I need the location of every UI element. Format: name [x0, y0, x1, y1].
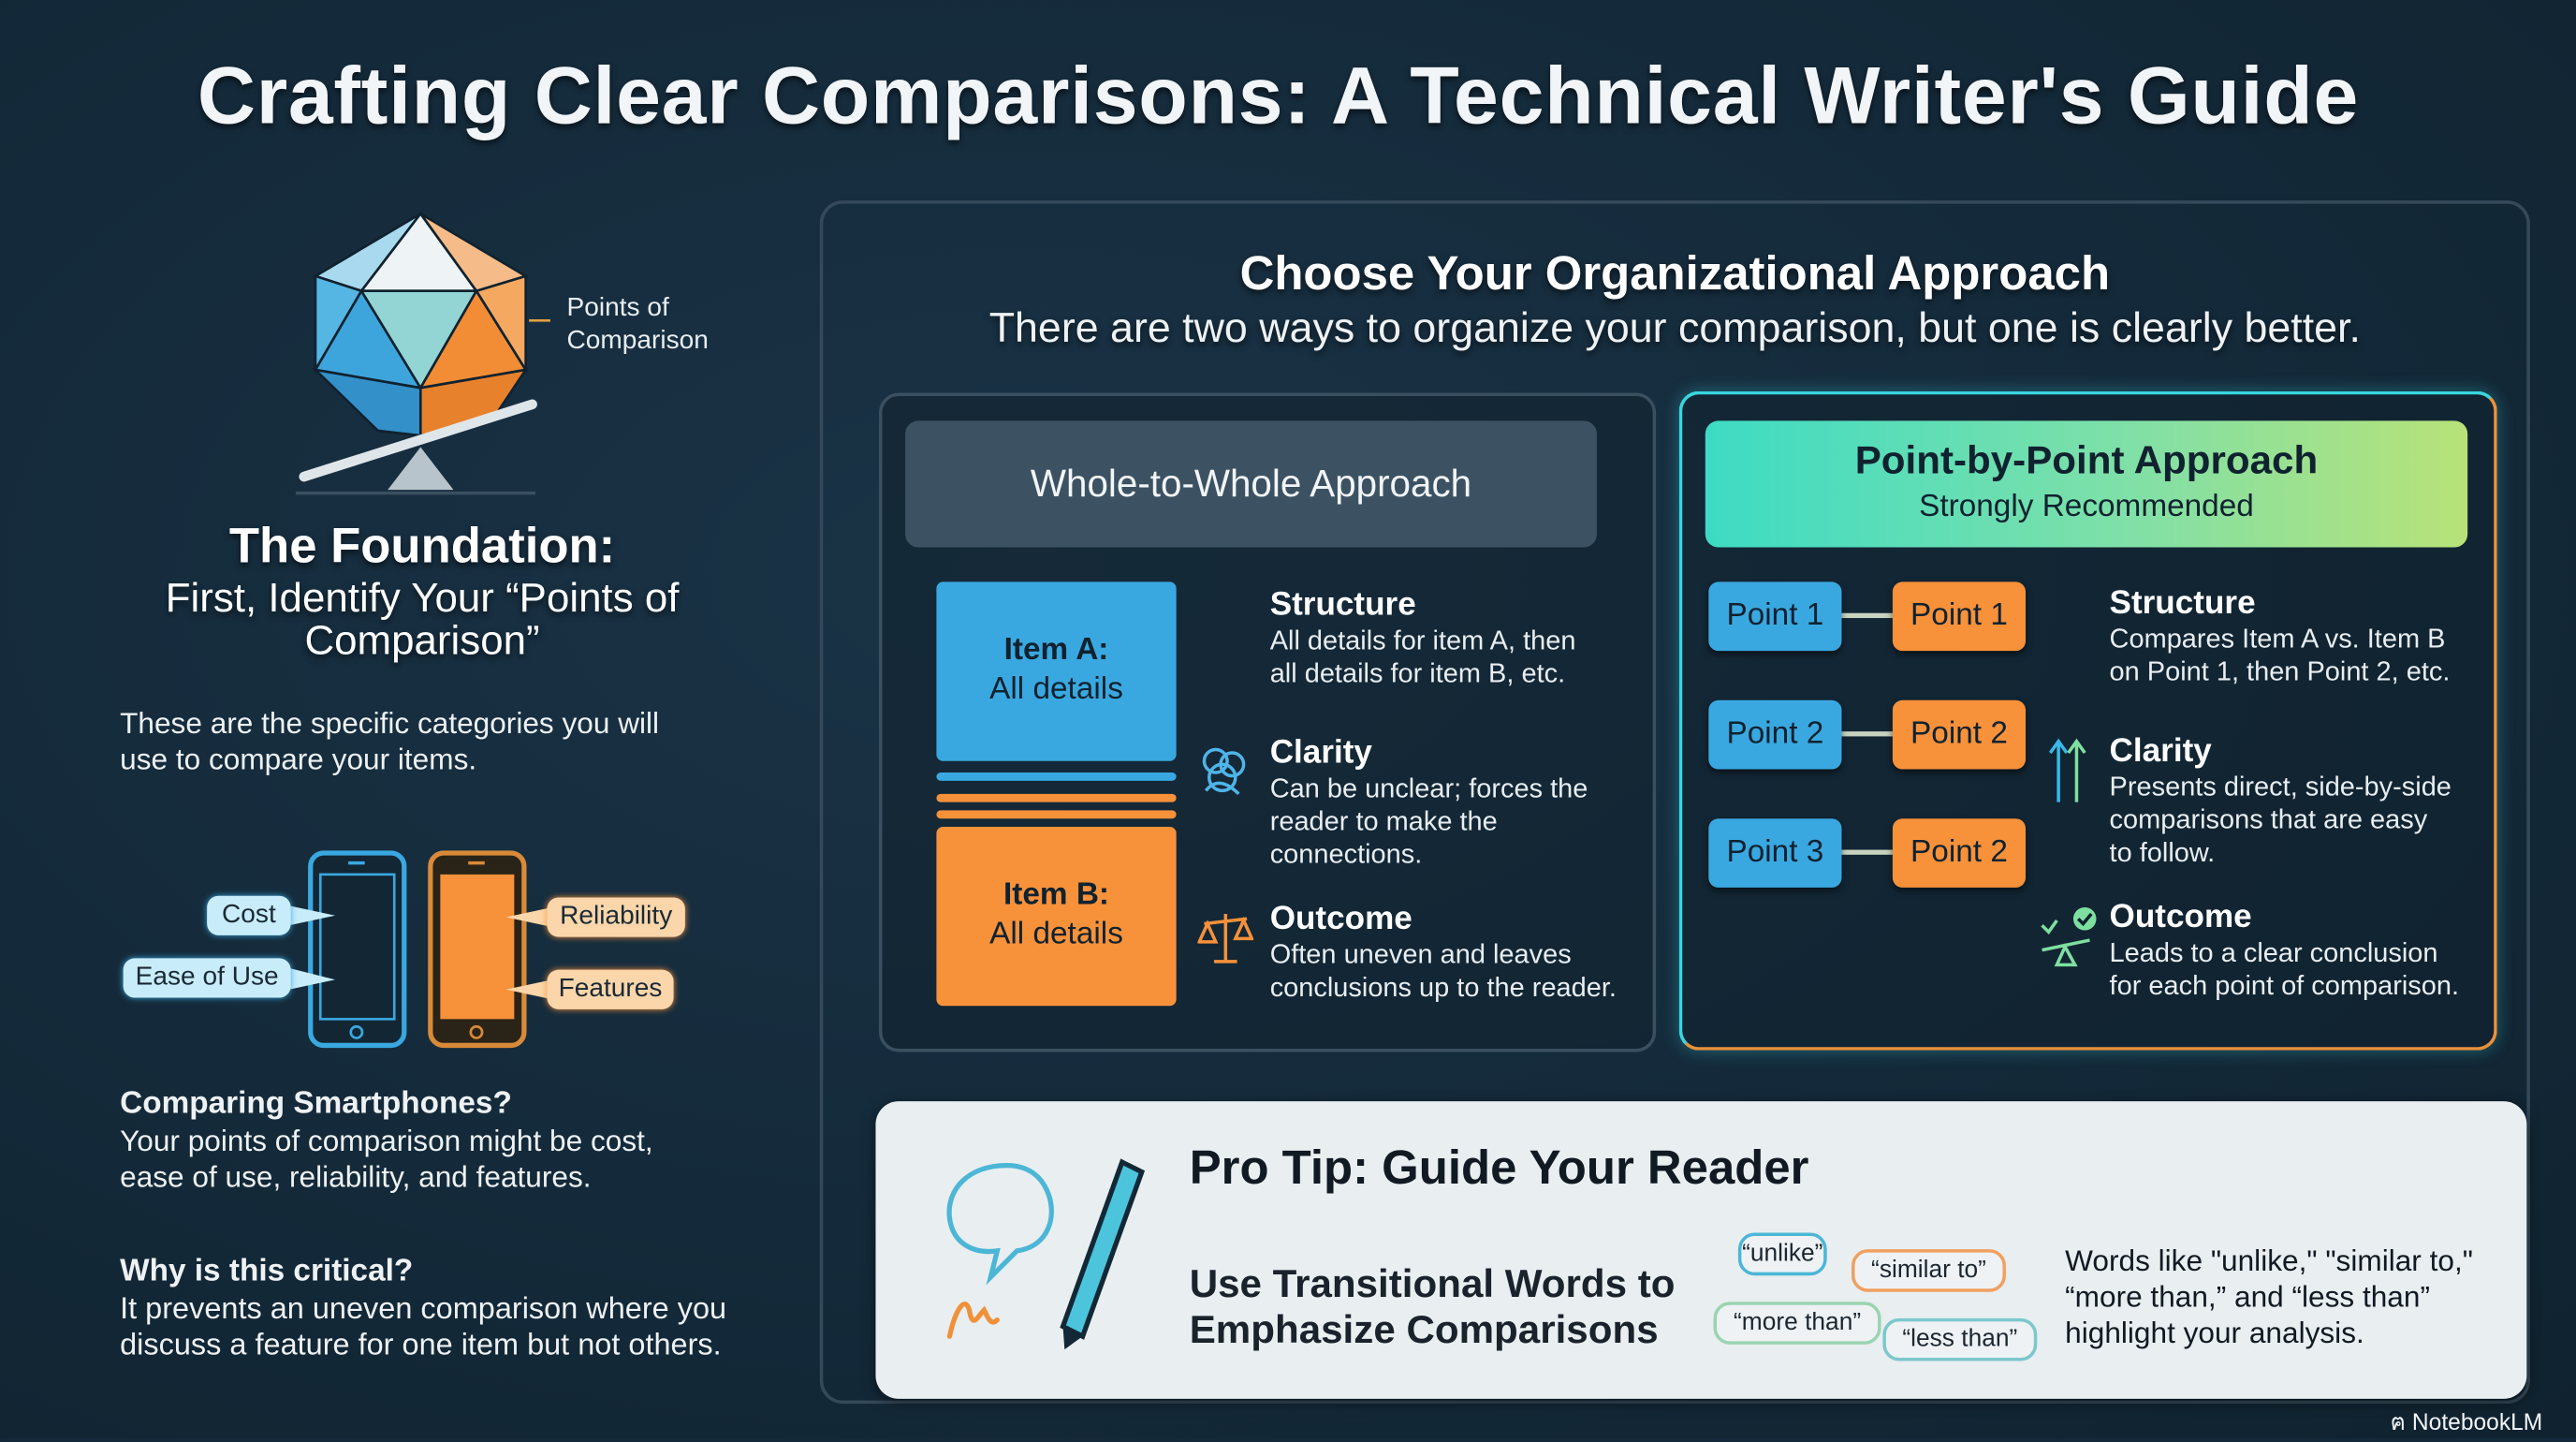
- text: outcome: [1270, 901, 1617, 1003]
- text: clarity: Can be unclear; forces the: [1270, 774, 1588, 803]
- icon: tangled knot: [1202, 747, 1245, 796]
- text: categories: use to compare your items.: [120, 743, 476, 776]
- text: outcome: Outcome: [2110, 899, 2252, 935]
- text: clarity: connections.: [1270, 840, 1422, 870]
- text: comparing smartphones: Comparing Smartphones?: [120, 1086, 512, 1121]
- panel: organizational approach: [820, 200, 2530, 1404]
- header: point-by-point: Strongly Recommended: [1919, 490, 2254, 524]
- text: structure: all details for item B, etc.: [1270, 659, 1565, 689]
- text: categories: These are the specific categories you will: [120, 707, 659, 740]
- text: outcome: Often uneven and leaves: [1270, 940, 1572, 970]
- speech bubbles: transitional words: [1713, 1232, 2037, 1361]
- heading: choose approach: [989, 248, 2361, 356]
- text: clarity: [1270, 735, 1588, 870]
- header: point-by-point: [1705, 420, 2467, 548]
- tag: cost: Cost: [222, 901, 276, 929]
- diagram: point pairs: Point 2: [1726, 716, 1823, 751]
- text: clarity: Clarity: [2110, 733, 2212, 770]
- text: why critical: discuss a feature for one item but not others.: [120, 1327, 722, 1361]
- heading: the foundation: The Foundation:: [229, 520, 615, 574]
- text: outcome: conclusions up to the reader.: [1270, 973, 1617, 1003]
- panel: pro tip: [875, 1101, 2526, 1399]
- text: clarity: reader to make the: [1270, 807, 1498, 836]
- block: item A: [936, 581, 1177, 761]
- heading: the foundation: Comparison”: [304, 618, 540, 664]
- tag: reliability: [547, 897, 685, 937]
- heading: choose approach: There are two ways to organize your comparison, but one is clearly better.: [989, 306, 2361, 352]
- icon: outcome check: [2041, 907, 2097, 966]
- block: item A: All details: [989, 672, 1123, 707]
- text: structure: [1269, 587, 1575, 689]
- diagram: point pairs: Point 2: [1910, 835, 2008, 870]
- label: points of comparison: Comparison: [567, 327, 709, 355]
- tag: features: [547, 970, 674, 1009]
- speech bubbles: transitional words: “less than”: [1902, 1325, 2017, 1353]
- icon: speech bubble and pen: [946, 1158, 1145, 1350]
- text: structure: Compares Item A vs. Item B: [2110, 625, 2445, 655]
- diagram: point pairs: Point 2: [1910, 716, 2008, 751]
- text: clarity: Clarity: [1270, 735, 1372, 771]
- heading: the foundation: [166, 520, 680, 666]
- stripes: [936, 772, 1177, 818]
- header: whole-to-whole: [905, 420, 1597, 548]
- text: structure: [2110, 585, 2450, 687]
- text: why critical: It prevents an uneven comparison where you: [120, 1290, 726, 1325]
- icon: scales: [1197, 914, 1254, 964]
- heading: pro tip: Pro Tip: Guide Your Reader: [1190, 1142, 1809, 1195]
- label: points of comparison: [567, 294, 709, 355]
- tag: cost: [207, 896, 291, 935]
- text: words like: “more than,” and “less than”: [2065, 1280, 2430, 1314]
- text: structure: Structure: [1270, 587, 1416, 623]
- header: whole-to-whole: Whole-to-Whole Approach: [1031, 462, 1471, 505]
- logo: notebooklm: ฅ NotebookLM: [2391, 1408, 2542, 1435]
- diagram: point pairs: [1706, 581, 2027, 893]
- block: item B: [936, 827, 1177, 1006]
- block: item B: Item B:: [1003, 877, 1109, 912]
- tag: features: Features: [559, 975, 662, 1003]
- text: clarity: Presents direct, side-by-side: [2110, 772, 2452, 802]
- text: structure: on Point 1, then Point 2, etc.: [2110, 657, 2450, 687]
- title: Crafting Clear Comparisons: A Technical Writer's Guide: [198, 52, 2359, 141]
- text: use transitional words: Use Transitional Words to: [1190, 1262, 1676, 1307]
- text: structure: Structure: [2110, 585, 2256, 622]
- panel: point-by-point: [1679, 391, 2497, 1051]
- text: words like: [2065, 1244, 2473, 1349]
- speech bubbles: transitional words: “unlike”: [1742, 1240, 1822, 1267]
- diagram: point pairs: Point 1: [1726, 598, 1823, 633]
- heading: the foundation: First, Identify Your “Points of: [166, 575, 679, 622]
- block: item A: Item A:: [1004, 633, 1108, 668]
- text: comparing smartphones: [120, 1086, 653, 1193]
- text: words like: highlight your analysis.: [2065, 1317, 2364, 1349]
- text: use transitional words: [1190, 1262, 1676, 1353]
- text: structure: All details for item A, then: [1270, 626, 1575, 655]
- tag: ease of use: Ease of Use: [136, 964, 279, 992]
- speech bubbles: transitional words: “more than”: [1734, 1308, 1861, 1336]
- text: why critical: [120, 1254, 726, 1361]
- icon: smartphones with labels: [118, 850, 691, 1049]
- tag: reliability: Reliability: [560, 903, 672, 931]
- diagram: point pairs: Point 1: [1910, 598, 2008, 633]
- text: words like: Words like "unlike," "similar to,": [2065, 1244, 2473, 1277]
- icon: crystal on balance: [296, 212, 550, 494]
- text: outcome: for each point of comparison.: [2110, 971, 2459, 1001]
- text: outcome: Outcome: [1270, 901, 1412, 937]
- text: outcome: Leads to a clear conclusion: [2110, 938, 2438, 968]
- text: comparing smartphones: Your points of comparison might be cost,: [120, 1125, 653, 1157]
- diagram: point pairs: Point 3: [1726, 835, 1823, 870]
- text: clarity: to follow.: [2110, 838, 2215, 868]
- label: points of comparison: Points of: [567, 294, 669, 322]
- panel: whole-to-whole: [879, 393, 1656, 1052]
- text: why critical: Why is this critical?: [120, 1254, 413, 1288]
- header: point-by-point: Point-by-Point Approach: [1855, 439, 2318, 483]
- tag: ease of use: [124, 958, 291, 998]
- text: outcome: [2110, 899, 2459, 1001]
- text: clarity: comparisons that are easy: [2110, 805, 2427, 835]
- text: categories: [120, 707, 659, 776]
- text: use transitional words: Emphasize Comparisons: [1190, 1308, 1659, 1353]
- text: clarity: [2110, 733, 2452, 868]
- heading: choose approach: Choose Your Organizational Approach: [1240, 248, 2110, 301]
- block: item B: All details: [989, 918, 1123, 951]
- text: comparing smartphones: ease of use, reliability, and features.: [120, 1160, 592, 1193]
- icon: up arrows: [2049, 738, 2086, 802]
- speech bubbles: transitional words: “similar to”: [1871, 1256, 1986, 1284]
